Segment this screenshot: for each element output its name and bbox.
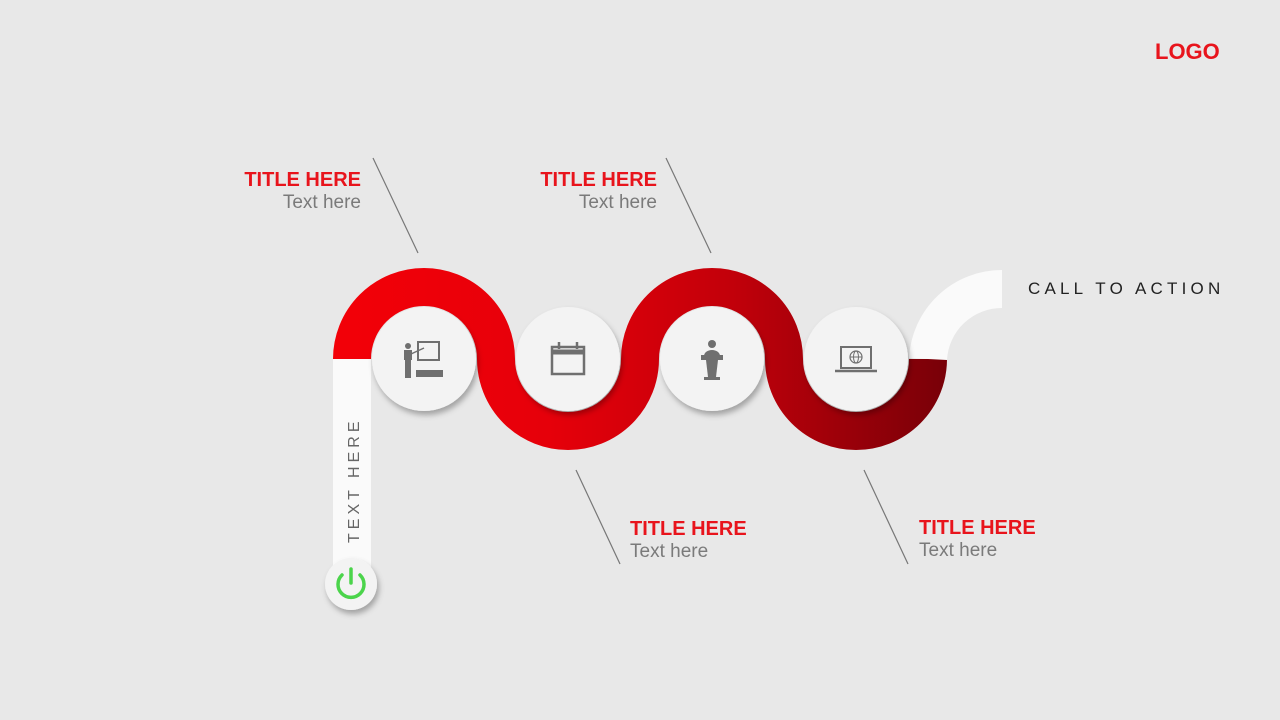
label 4: Text here	[919, 540, 997, 561]
vertical text: TEXT HERE	[346, 418, 363, 543]
label 1	[244, 169, 361, 213]
icon: presentation	[404, 342, 443, 378]
connector lines	[373, 158, 908, 564]
red wave band	[352, 287, 928, 431]
label 4: TITLE HERE	[919, 517, 1036, 539]
label 4	[919, 517, 1036, 561]
power button	[325, 558, 377, 610]
label 3: TITLE HERE	[630, 518, 747, 540]
call to action: CALL TO ACTION	[1028, 279, 1224, 298]
label 1: TITLE HERE	[244, 169, 361, 191]
label 3	[630, 518, 747, 562]
label 1: Text here	[283, 192, 361, 213]
step circles	[372, 307, 908, 411]
label 2: TITLE HERE	[540, 169, 657, 191]
icon: calendar	[552, 342, 584, 374]
white vertical bar	[333, 359, 371, 585]
white tail arc	[928, 289, 1002, 359]
logo: LOGO	[1155, 39, 1220, 64]
label 3: Text here	[630, 541, 708, 562]
icon: laptop globe	[835, 347, 877, 371]
icon: speaker podium	[701, 340, 723, 380]
label 2: Text here	[579, 192, 657, 213]
label 2	[540, 169, 657, 213]
